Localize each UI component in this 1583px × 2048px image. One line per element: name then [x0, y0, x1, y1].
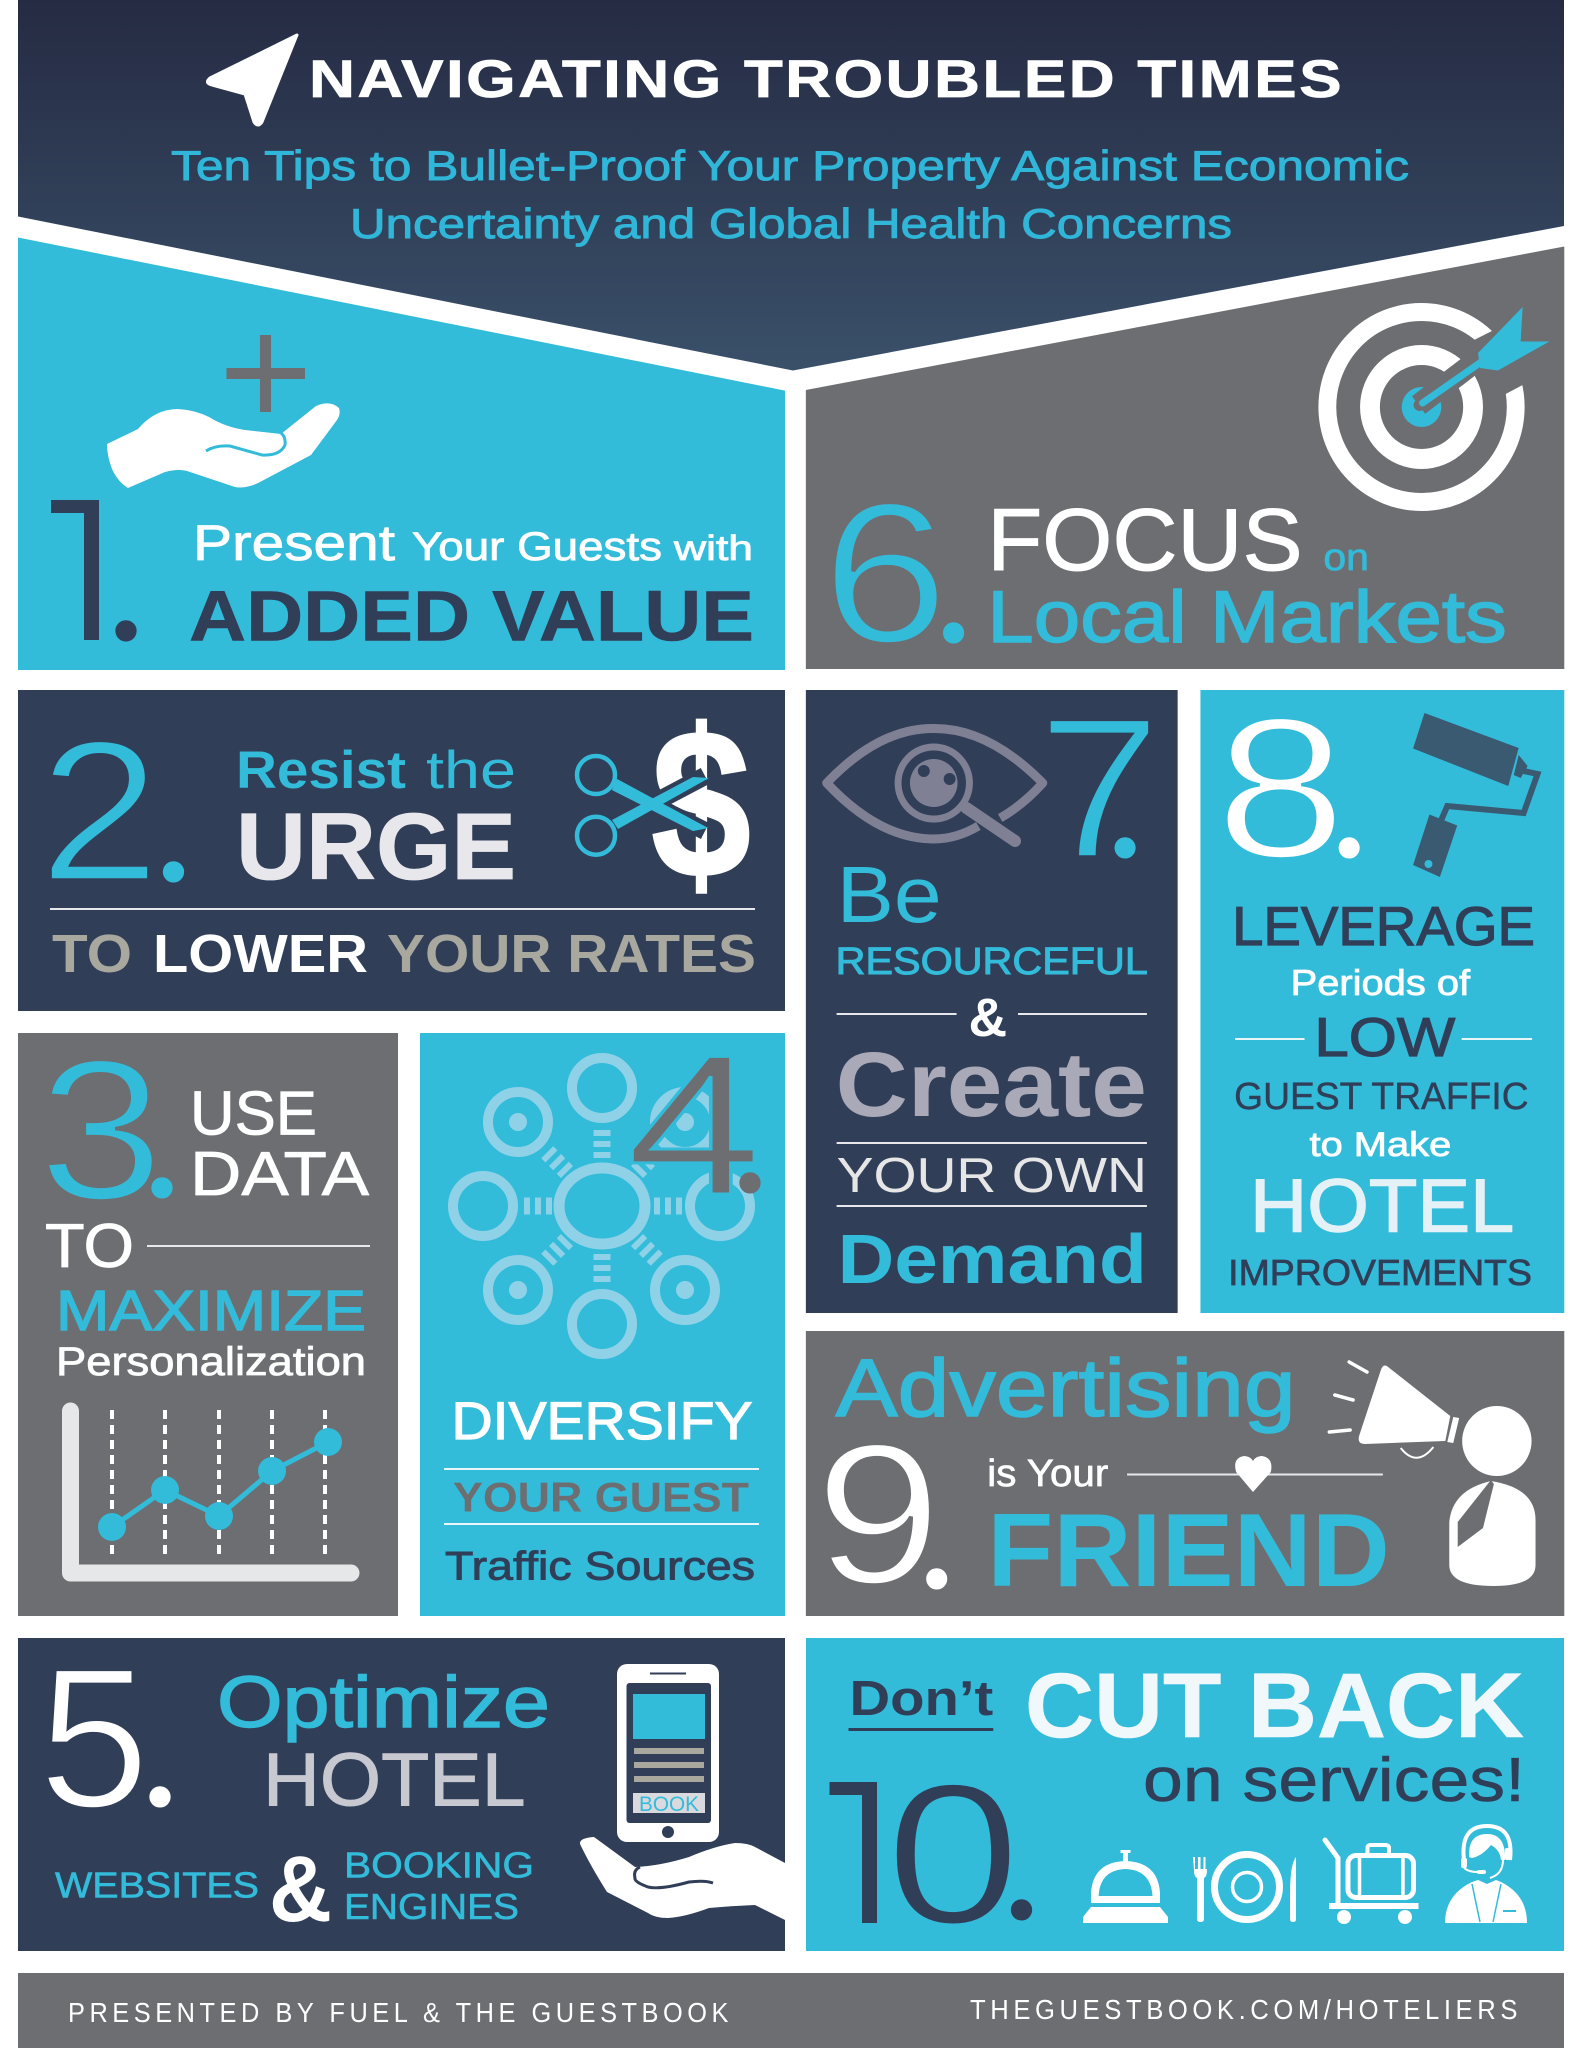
- heading: be resourceful: [836, 850, 1148, 983]
- heading: don't: Don’t: [849, 1672, 993, 1726]
- line chart: [70, 1410, 351, 1573]
- text: websites and booking engines: BOOKING: [344, 1845, 534, 1886]
- panel: header: [18, 0, 1564, 370]
- heading: create: Create: [836, 1034, 1147, 1136]
- footer text: presented by: PRESENTED BY FUEL & THE GUESTBOOK: [68, 1997, 733, 2028]
- heading: added value: ADDED VALUE: [189, 578, 754, 657]
- heading: present your guests with: with: [673, 529, 753, 568]
- icon: scissors cutting dollar: $: [651, 685, 751, 922]
- heading: use data to: DATA: [190, 1140, 370, 1209]
- text: is your: is Your: [987, 1453, 1108, 1495]
- number 2: .: [151, 720, 196, 919]
- text: traffic sources: Traffic Sources: [445, 1544, 755, 1588]
- number 8: 8: [1215, 677, 1346, 900]
- footer bar: [18, 1973, 1564, 2048]
- text: to make: to Make: [1309, 1126, 1451, 1164]
- text: ampersand with rules: &: [968, 988, 1007, 1048]
- heading: optimize: Optimize: [217, 1663, 550, 1743]
- panel: tip 1: [18, 238, 785, 683]
- heading: be resourceful: RESOURCEFUL: [836, 941, 1148, 983]
- number 6: 6: [822, 462, 949, 685]
- panel: tip 9: [806, 1331, 1564, 1626]
- text: improvements: IMPROVEMENTS: [1228, 1253, 1532, 1293]
- number 9: 9: [815, 1403, 942, 1626]
- icon: service bell: [1083, 1850, 1168, 1923]
- icon: phone in hand: [580, 1664, 785, 1920]
- subtitle: Uncertainty and Global Health Concerns: [350, 200, 1232, 247]
- number 10: 1: [810, 1743, 922, 1966]
- heading: cut back: CUT BACK: [1025, 1655, 1524, 1757]
- number 10: 0: [886, 1743, 1020, 1966]
- heading: hotel: HOTEL: [1250, 1163, 1514, 1248]
- number 10: .: [999, 1758, 1044, 1957]
- number 7: 7: [1037, 677, 1161, 900]
- heading: use data to: TO: [45, 1212, 134, 1281]
- icon: target with arrow: [1327, 307, 1549, 502]
- icon: phone in hand: BOOK: [639, 1793, 699, 1816]
- heading: hotel: HOTEL: [263, 1738, 526, 1822]
- heading: use data to: [45, 1080, 370, 1281]
- icon: eye with magnifier: [827, 728, 1043, 841]
- icon: man with megaphone: [1329, 1362, 1536, 1586]
- heading: be resourceful: Be: [837, 850, 942, 939]
- number 2: 2: [39, 700, 160, 923]
- icon: navigation arrow: [207, 35, 297, 125]
- icon: hand with plus: [107, 335, 340, 488]
- heading: resist the: [236, 741, 516, 800]
- number 4: 4: [626, 1014, 762, 1237]
- heading: to lower your rates: YOUR RATES: [387, 924, 756, 984]
- heading: resist the: Resist: [236, 741, 406, 800]
- heading: your guest: YOUR GUEST: [453, 1474, 749, 1520]
- icon: plate and cutlery: [1193, 1854, 1296, 1922]
- panel: tip 6: [806, 246, 1564, 685]
- heading: urge: URGE: [236, 794, 516, 900]
- heading: present your guests with: [193, 515, 753, 571]
- title: NAVIGATING TROUBLED TIMES: [309, 50, 1344, 109]
- heading: to lower your rates: [50, 908, 756, 984]
- heading: focus on: on: [1323, 537, 1369, 579]
- number 7: .: [1103, 695, 1147, 895]
- icon: heart line: [1127, 1456, 1383, 1492]
- subtitle: [171, 142, 1409, 247]
- panel: tip 2: [18, 685, 785, 1011]
- heading: friend: FRIEND: [987, 1492, 1390, 1608]
- text: periods of: Periods of: [1291, 963, 1470, 1003]
- number 9: .: [914, 1426, 959, 1626]
- text: guest traffic: GUEST TRAFFIC: [1234, 1076, 1529, 1118]
- icon: paint roller: [1413, 713, 1538, 877]
- panel: tip 10: [806, 1638, 1564, 1966]
- text: websites and booking engines: [55, 1836, 534, 1941]
- panel: tip 3: [18, 1019, 398, 1616]
- text: websites and booking engines: WEBSITES: [55, 1865, 259, 1906]
- heading: focus on: FOCUS: [987, 491, 1303, 589]
- heading: use data to: USE: [190, 1080, 317, 1148]
- number 5: .: [138, 1645, 182, 1844]
- heading: to lower your rates: LOWER: [153, 924, 368, 984]
- panel: tip 8: [1200, 677, 1564, 1313]
- icon: network: [453, 1058, 750, 1354]
- panel: tip 7: [806, 677, 1178, 1313]
- heading: present your guests with: Your Guests: [412, 525, 662, 569]
- heading: advertising: Advertising: [836, 1343, 1296, 1434]
- text: websites and booking engines: &: [269, 1836, 332, 1941]
- number 6: .: [931, 480, 976, 680]
- heading: personalization: Personalization: [56, 1340, 366, 1384]
- text: your own: YOUR OWN: [837, 1149, 1147, 1203]
- panel: tip 4: [420, 1014, 785, 1616]
- number 1: [51, 500, 137, 642]
- number 3: 3: [38, 1019, 164, 1242]
- number 1: .: [104, 479, 148, 678]
- heading: resist the: the: [426, 741, 516, 800]
- icon: scissors cutting dollar: [577, 685, 751, 922]
- icon: customer service agent: [1445, 1826, 1527, 1923]
- heading: to lower your rates: TO: [52, 924, 132, 984]
- heading: local markets: Local Markets: [987, 577, 1507, 658]
- icon: luggage cart: [1325, 1840, 1418, 1924]
- number 3: .: [140, 1036, 184, 1235]
- number 1: 1: [32, 460, 144, 683]
- number 5: 5: [38, 1627, 150, 1850]
- subtitle: Ten Tips to Bullet-Proof Your Property Against Economic: [171, 142, 1409, 189]
- number 8: .: [1327, 695, 1371, 895]
- heading: present your guests with: Present: [193, 515, 395, 571]
- footer text: url: THEGUESTBOOK.COM/HOTELIERS: [970, 1994, 1522, 2025]
- heading: diversify: DIVERSIFY: [452, 1392, 752, 1451]
- number 4: .: [728, 1031, 772, 1230]
- number 10: [830, 1782, 1032, 1924]
- heading: low: LOW: [1314, 1006, 1456, 1068]
- text: on services: on services!: [1143, 1746, 1525, 1815]
- text: websites and booking engines: ENGINES: [344, 1886, 519, 1927]
- heading: leverage: LEVERAGE: [1232, 895, 1535, 957]
- heading: maximize: MAXIMIZE: [56, 1279, 366, 1343]
- panel: tip 5: [18, 1627, 785, 1951]
- heading: demand: Demand: [838, 1220, 1147, 1298]
